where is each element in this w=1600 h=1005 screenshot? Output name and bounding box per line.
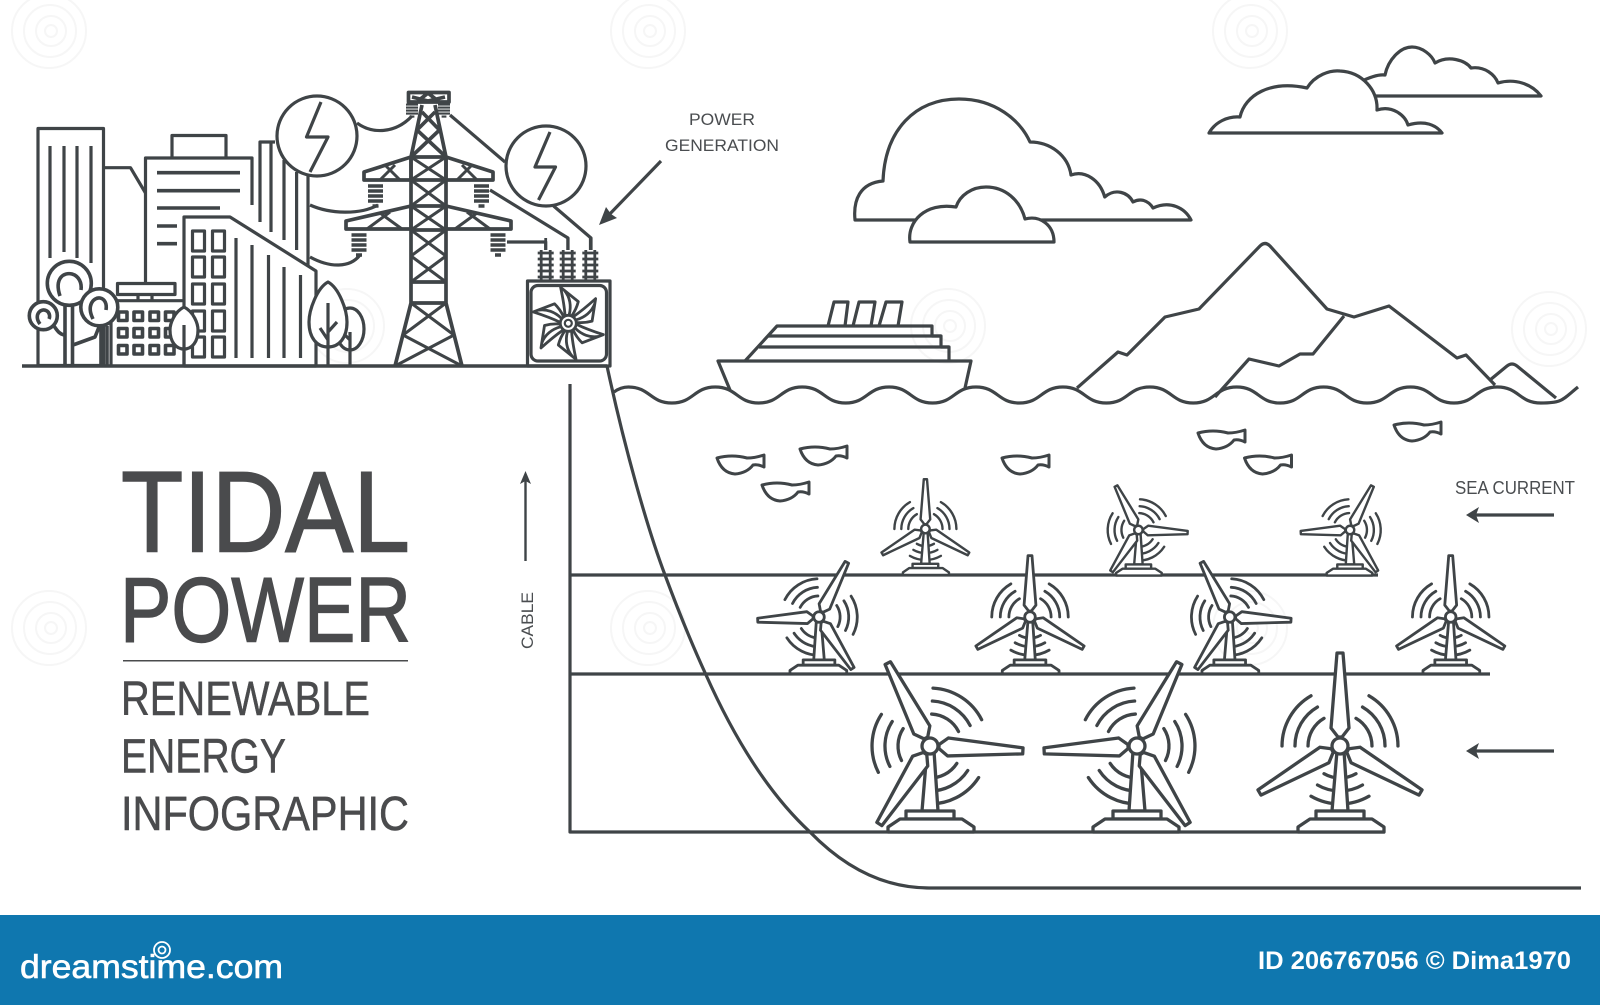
- arrow: sea current upper: [1466, 507, 1554, 523]
- building: front slanted block: [184, 217, 316, 366]
- footer bar: [0, 915, 1600, 1005]
- power generation label: [665, 110, 779, 155]
- divider rule: [123, 660, 408, 662]
- arrow: sea current lower: [1466, 743, 1554, 759]
- turbines row 3: [871, 653, 1425, 832]
- mountains: [1077, 244, 1556, 398]
- heading: power: POWER: [120, 560, 411, 662]
- turbines row 2: [757, 556, 1507, 674]
- subtitle: energy: ENERGY: [121, 730, 286, 784]
- icon: fan: [532, 287, 604, 359]
- trees: left group: [29, 261, 118, 366]
- transformer with fan: [528, 238, 610, 366]
- building: right rear tower: [260, 142, 308, 266]
- clouds right: [1209, 47, 1541, 133]
- seabed slope: [607, 366, 1581, 888]
- ground line: [22, 364, 607, 368]
- cable rung upper: [570, 573, 1378, 577]
- power cables: [310, 115, 591, 265]
- ship: [718, 302, 971, 390]
- arrow: to transformer: [599, 161, 661, 225]
- sea current label: SEA CURRENT: [1455, 478, 1575, 498]
- power generation label: POWER: [689, 110, 755, 129]
- logo spiral: [154, 942, 170, 958]
- building: low block with windows: [111, 284, 184, 366]
- sea waves: [614, 387, 1578, 403]
- subtitle: infographic: INFOGRAPHIC: [121, 787, 409, 841]
- clouds left: [855, 99, 1191, 242]
- turbines row 1: [880, 479, 1381, 576]
- cable arrow: [520, 471, 531, 561]
- city skyline: [29, 128, 364, 366]
- heading: tidal: TIDAL: [121, 449, 410, 577]
- power generation label: GENERATION: [665, 136, 779, 155]
- tree: small centre tree: [170, 307, 198, 366]
- image id: ID 206767056 © Dima1970: [1258, 947, 1571, 975]
- trees: right pair: [309, 282, 364, 366]
- logo wordmark: dreamstime.com: [20, 948, 283, 985]
- building: central office block: [146, 136, 252, 284]
- cable label: CABLE: [518, 592, 537, 649]
- watermark spirals: [12, 0, 1586, 665]
- title: [120, 449, 411, 841]
- building: tall left tower: [38, 128, 146, 366]
- fish school: [717, 422, 1441, 501]
- subtitle: renewable: RENEWABLE: [121, 672, 370, 726]
- cable rung lower: [570, 672, 1490, 676]
- cable axis: [570, 384, 1385, 832]
- icon: lightning circle right: [506, 126, 586, 206]
- electricity pylon: [346, 92, 511, 366]
- icon: lightning circle left: [277, 96, 357, 176]
